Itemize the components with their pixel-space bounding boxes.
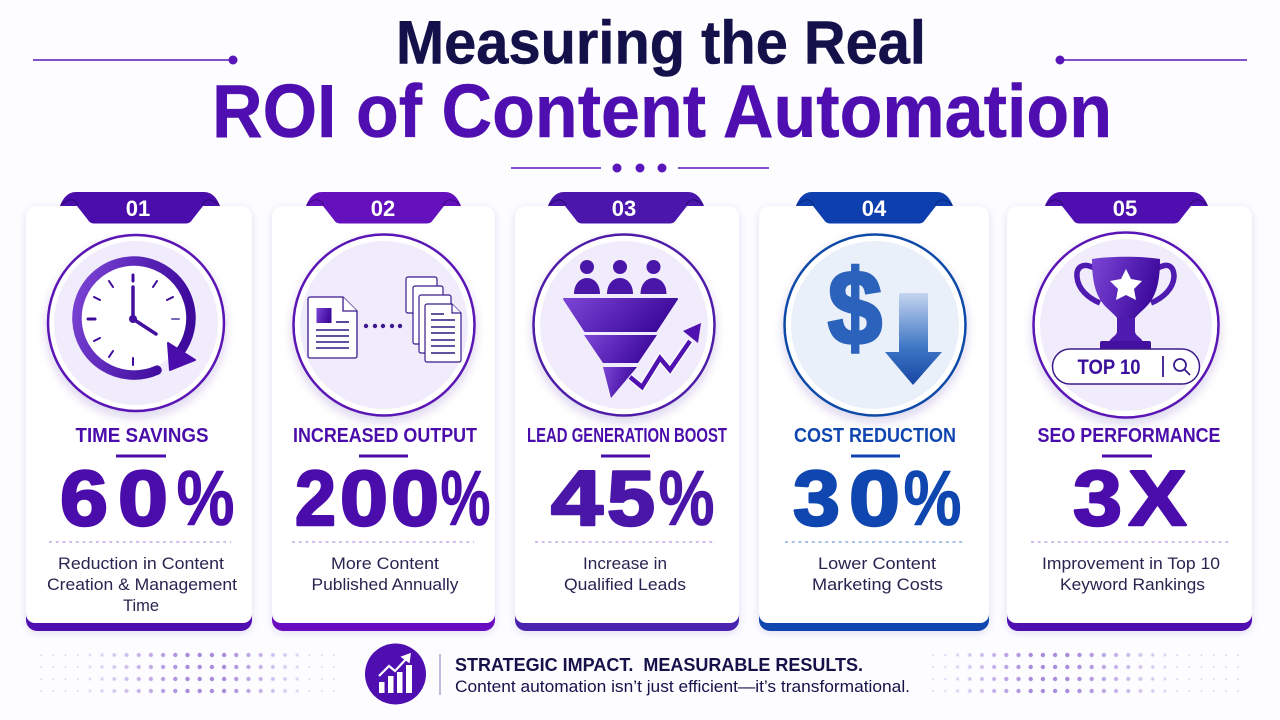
rule — [116, 454, 166, 458]
metric 3X: X — [1128, 454, 1186, 542]
metric 3X: 3 — [1073, 454, 1122, 542]
dotted connector — [364, 324, 402, 328]
metric 45%: % — [658, 454, 714, 542]
panel: cost reduction — [759, 192, 989, 631]
dotted rule — [1031, 541, 1230, 543]
description: Published Annually — [312, 576, 459, 594]
left title rule — [33, 56, 238, 64]
metric 30%: % — [904, 454, 962, 542]
panel: seo performance — [1007, 192, 1252, 631]
metric 200%: 0 — [391, 454, 439, 542]
description: Qualified Leads — [564, 576, 686, 594]
card 1 background — [26, 206, 252, 631]
stacked documents — [406, 277, 461, 362]
title: Measuring the Real — [396, 8, 926, 76]
footer text: Content automation isn’t just efficient—it’s transformational. — [455, 678, 910, 696]
trophy — [1077, 257, 1174, 350]
icon: funnel with growth arrow — [534, 234, 714, 416]
description: More Content — [331, 555, 439, 573]
number tab 01: 01 — [126, 196, 150, 221]
title — [212, 8, 1112, 153]
card 2 background — [272, 206, 495, 631]
description: Increase in — [583, 555, 667, 573]
metric 30%: 3 — [793, 454, 840, 542]
funnel — [564, 299, 677, 398]
panel: increased output — [272, 192, 495, 631]
label: LEAD GENERATION BOOST — [527, 425, 727, 447]
metric 200%: % — [440, 454, 490, 542]
metric 45%: 4 — [551, 454, 603, 542]
three people — [574, 260, 666, 294]
search bar — [1052, 349, 1200, 384]
metric 60%: 6 — [60, 454, 108, 542]
icon: dollar and down arrow — [784, 234, 966, 416]
number tab 02 — [306, 192, 461, 224]
description: Time — [123, 597, 159, 615]
label: TIME SAVINGS — [76, 425, 208, 447]
card 5 background — [1007, 206, 1252, 631]
metric 60%: 0 — [118, 454, 168, 542]
icon: documents multiplied — [294, 234, 474, 416]
footer icon: growth chart — [365, 644, 426, 704]
dotted rule — [535, 541, 716, 543]
label: COST REDUCTION — [794, 425, 956, 447]
footer headline: STRATEGIC IMPACT. MEASURABLE RESULTS. — [455, 654, 863, 675]
dot pattern left — [40, 652, 335, 694]
dollar sign: $ — [828, 249, 882, 367]
number tab 04: 04 — [862, 196, 887, 221]
title: ROI of Content Automation — [212, 69, 1112, 153]
icon: trophy with search bar — [1034, 232, 1218, 418]
dotted rule — [49, 541, 231, 543]
number tab 03: 03 — [612, 196, 636, 221]
down arrow — [885, 293, 942, 385]
metric 45%: 5 — [607, 454, 655, 542]
dotted rule — [785, 541, 966, 543]
search icon — [1163, 356, 1190, 377]
footer divider — [439, 654, 441, 695]
description: Creation & Management — [47, 576, 237, 594]
panel: time savings — [26, 192, 252, 631]
card 4 background — [759, 206, 989, 631]
dollar highlight bar — [851, 287, 859, 333]
growth arrow — [630, 323, 701, 387]
right title rule — [1056, 56, 1247, 64]
metric 200%: 2 — [295, 454, 336, 542]
dot pattern right — [932, 652, 1239, 694]
rule — [601, 454, 650, 458]
dotted rule — [292, 541, 474, 543]
label: INCREASED OUTPUT — [293, 425, 477, 447]
number tab 03 — [548, 192, 704, 224]
metric 30%: 0 — [849, 454, 900, 542]
number tab 05 — [1045, 192, 1208, 224]
number tab 05: 05 — [1113, 196, 1137, 221]
description: Reduction in Content — [58, 555, 224, 573]
panel: lead generation boost — [515, 192, 739, 631]
card 3 background — [515, 206, 739, 631]
metric 60%: % — [176, 454, 234, 542]
number tab 02: 02 — [371, 196, 395, 221]
title divider — [511, 164, 769, 172]
metric 200%: 0 — [340, 454, 388, 542]
description: Keyword Rankings — [1060, 576, 1205, 594]
icon: clock with arrow — [48, 235, 224, 411]
description: Lower Content — [818, 555, 936, 573]
rule — [1102, 454, 1152, 458]
top 10 text: TOP 10 — [1078, 356, 1140, 379]
number tab 04 — [796, 192, 953, 224]
rule — [359, 454, 408, 458]
description: Improvement in Top 10 — [1042, 555, 1220, 573]
single document — [308, 297, 357, 358]
label: SEO PERFORMANCE — [1038, 425, 1220, 447]
rule — [851, 454, 900, 458]
number tab 01 — [60, 192, 220, 224]
description: Marketing Costs — [812, 576, 943, 594]
